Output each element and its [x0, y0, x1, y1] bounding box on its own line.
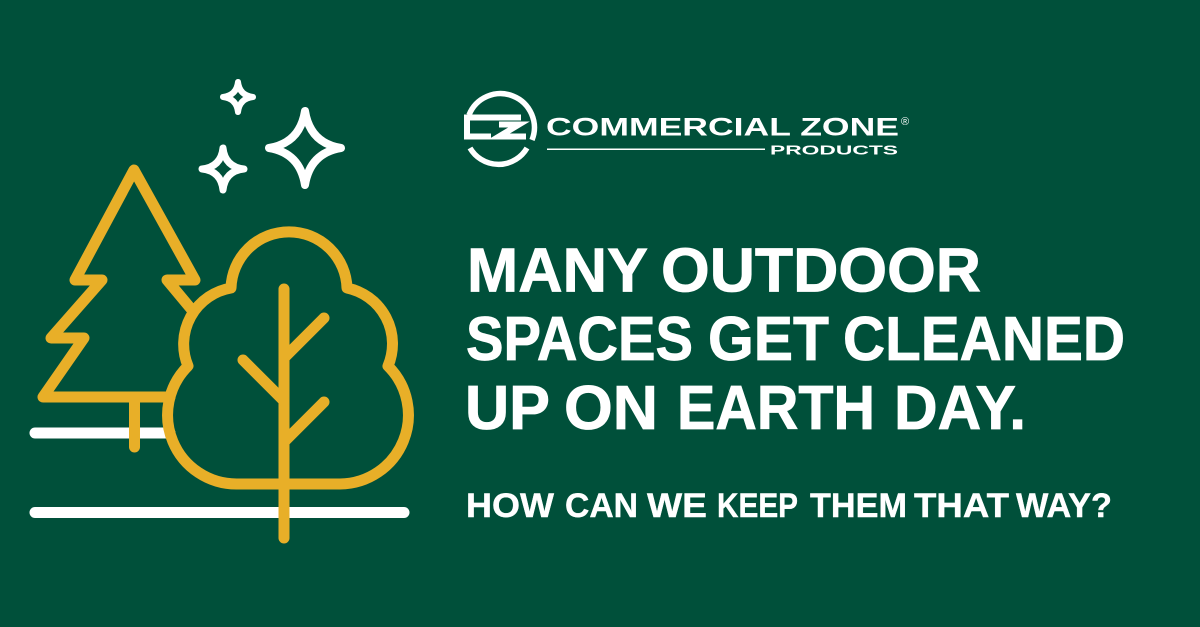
subheading question: THAT	[914, 487, 1009, 525]
headline: SPACES	[466, 305, 693, 374]
subheading question: HOW	[466, 487, 554, 525]
icon: round tree	[168, 232, 408, 538]
icon: pine tree	[43, 170, 195, 447]
subheading question: WAY?	[1016, 487, 1112, 525]
subheading question: CAN	[565, 487, 638, 525]
headline: CLEANED	[843, 305, 1125, 374]
headline: OUTDOOR	[661, 236, 981, 306]
subheading question: WE	[647, 487, 707, 525]
logo emblem	[467, 94, 534, 164]
icon: sparkling stars	[202, 82, 341, 190]
headline	[465, 236, 1125, 443]
logo wordmark: COMMERCIAL ZONE	[546, 114, 899, 142]
logo divider line	[547, 148, 765, 150]
headline: GET	[708, 305, 829, 374]
headline: DAY.	[894, 374, 1026, 443]
headline: ON	[564, 374, 658, 443]
logo: Commercial Zone Products	[467, 94, 909, 164]
subheading question: KEEP	[717, 487, 798, 525]
ground lines	[35, 433, 404, 512]
headline: MANY	[467, 236, 648, 306]
subheading question	[466, 487, 1112, 525]
headline: EARTH	[677, 374, 875, 443]
logo subline: PRODUCTS	[770, 142, 899, 158]
headline: UP	[465, 374, 550, 443]
subheading question: THEM	[810, 487, 907, 525]
logo registered mark: ®	[901, 116, 909, 128]
